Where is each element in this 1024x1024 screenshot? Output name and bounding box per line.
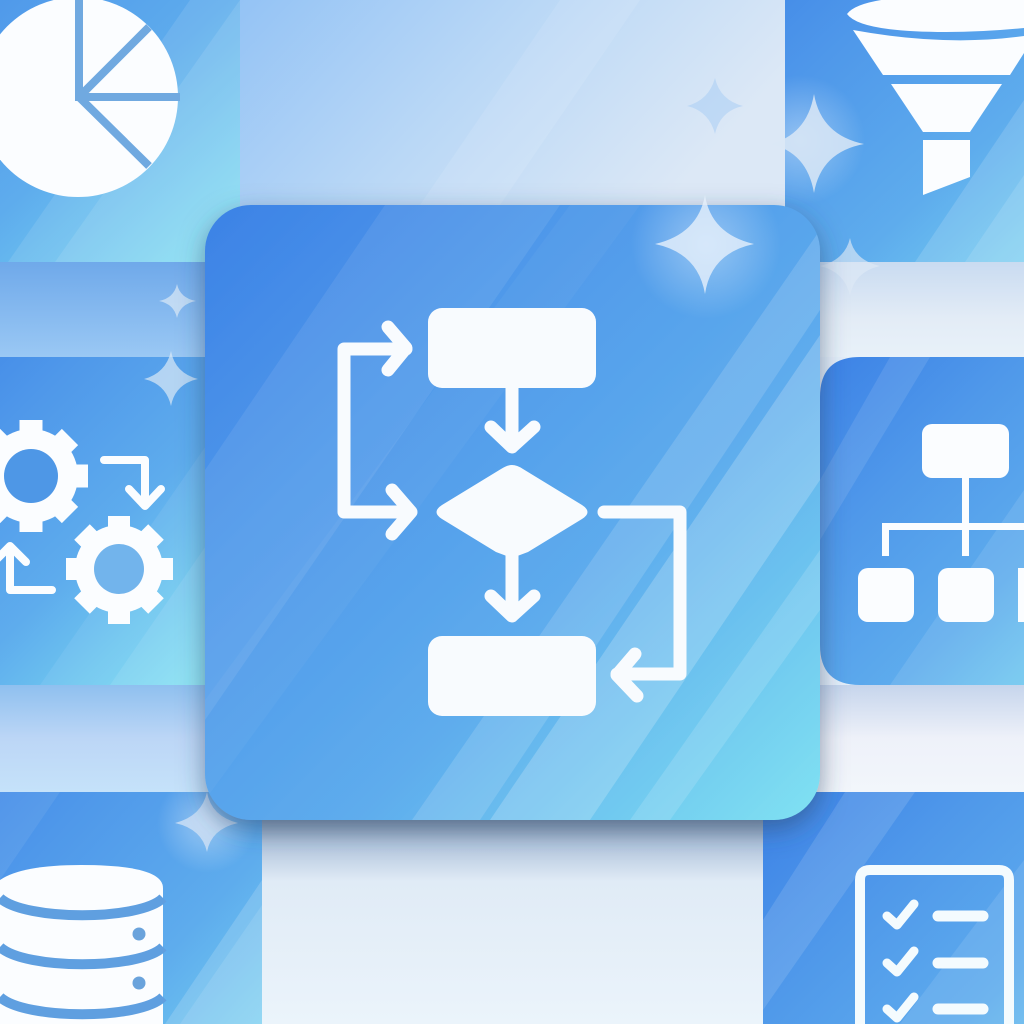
flowchart	[344, 308, 680, 716]
panel: org chart tile	[820, 357, 1024, 685]
icon: pie chart	[0, 0, 180, 197]
icon: upper gear	[0, 420, 88, 532]
panel: pie chart tile	[0, 0, 240, 262]
icon: sparkle	[655, 195, 754, 294]
icon: database	[0, 865, 163, 1024]
icon: funnel	[847, 0, 1024, 195]
panel: checklist tile	[763, 792, 1024, 1024]
icon: sparkle	[175, 792, 238, 852]
icon: sparkle small	[820, 238, 880, 296]
icon: checklist	[860, 870, 1009, 1024]
icon: sparkle	[770, 94, 864, 193]
icon: sparkle pair	[144, 284, 198, 406]
top process box	[428, 308, 596, 388]
decision diamond	[436, 465, 588, 558]
icon: org chart	[858, 424, 1024, 622]
panel: funnel tile	[785, 0, 1024, 282]
icon: lower gear	[66, 516, 173, 624]
icon: cycle arrows	[0, 460, 161, 590]
panel: database tile	[0, 773, 262, 1024]
diagonal light stripes	[205, 169, 820, 820]
bottom process box	[428, 636, 596, 716]
faint sparkle top middle	[687, 78, 743, 134]
panel: main flowchart tile	[205, 169, 820, 820]
panel: gears tile	[0, 284, 210, 685]
connector arrows	[344, 327, 680, 696]
